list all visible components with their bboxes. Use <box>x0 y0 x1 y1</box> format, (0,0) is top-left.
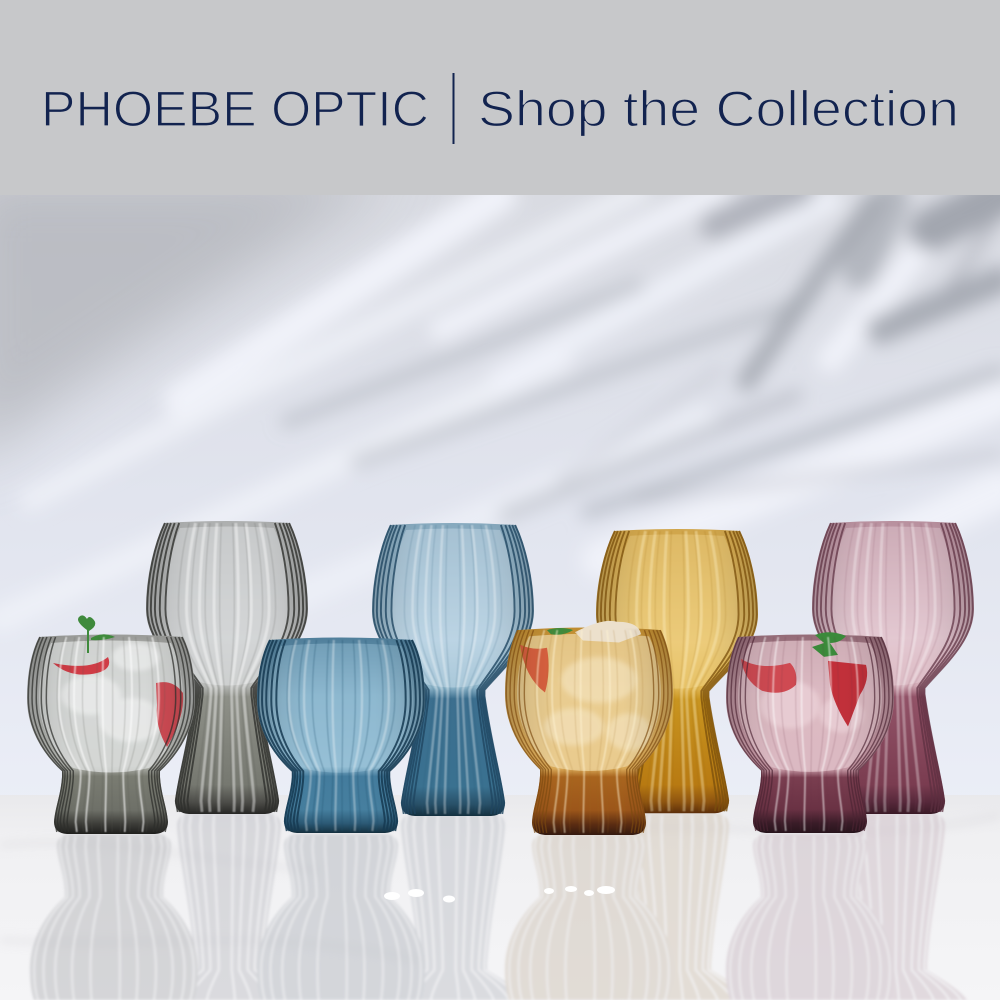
header band <box>0 0 1000 195</box>
reflection: short smoke <box>30 834 198 1000</box>
divider <box>452 73 454 144</box>
marble table surface <box>0 795 1000 1000</box>
drink and ice <box>39 640 183 772</box>
strawberry slice <box>520 645 549 692</box>
glass: tall amber <box>596 529 758 813</box>
strawberry slices <box>53 657 183 747</box>
mint sprig <box>78 615 115 653</box>
drink and ice <box>517 634 661 771</box>
glass: short amber with drink <box>505 621 673 835</box>
ice cubes <box>575 621 641 643</box>
photo background: wall with leaf shadows <box>0 170 1000 805</box>
glass: tall blue <box>372 523 534 816</box>
reflection: tall smoke <box>155 813 303 1000</box>
reflection: tall plum <box>819 813 967 1000</box>
heading: call to action: Shop the Collection <box>478 81 959 137</box>
reflection: short blue <box>257 834 425 1000</box>
glass: short blue <box>257 638 425 833</box>
reflection: tall blue <box>379 813 527 1000</box>
reflection: short amber <box>505 834 673 1000</box>
strawberry slice <box>741 659 796 693</box>
reflection: tall amber <box>603 813 751 1000</box>
reflection: short plum <box>726 834 894 1000</box>
glass: tall plum <box>812 521 974 814</box>
heading: collection name: PHOEBE OPTIC <box>41 81 429 137</box>
mint sprig <box>547 628 573 635</box>
water droplets on table <box>384 886 615 902</box>
reflections of glasses on table <box>30 813 967 1000</box>
glass: short smoke with drink <box>27 615 195 834</box>
glass: tall smoke <box>146 521 308 814</box>
drink and ice <box>738 640 882 772</box>
glass: short plum with drink <box>726 632 894 833</box>
strawberry wedge <box>828 661 867 727</box>
mint sprig <box>812 632 846 657</box>
